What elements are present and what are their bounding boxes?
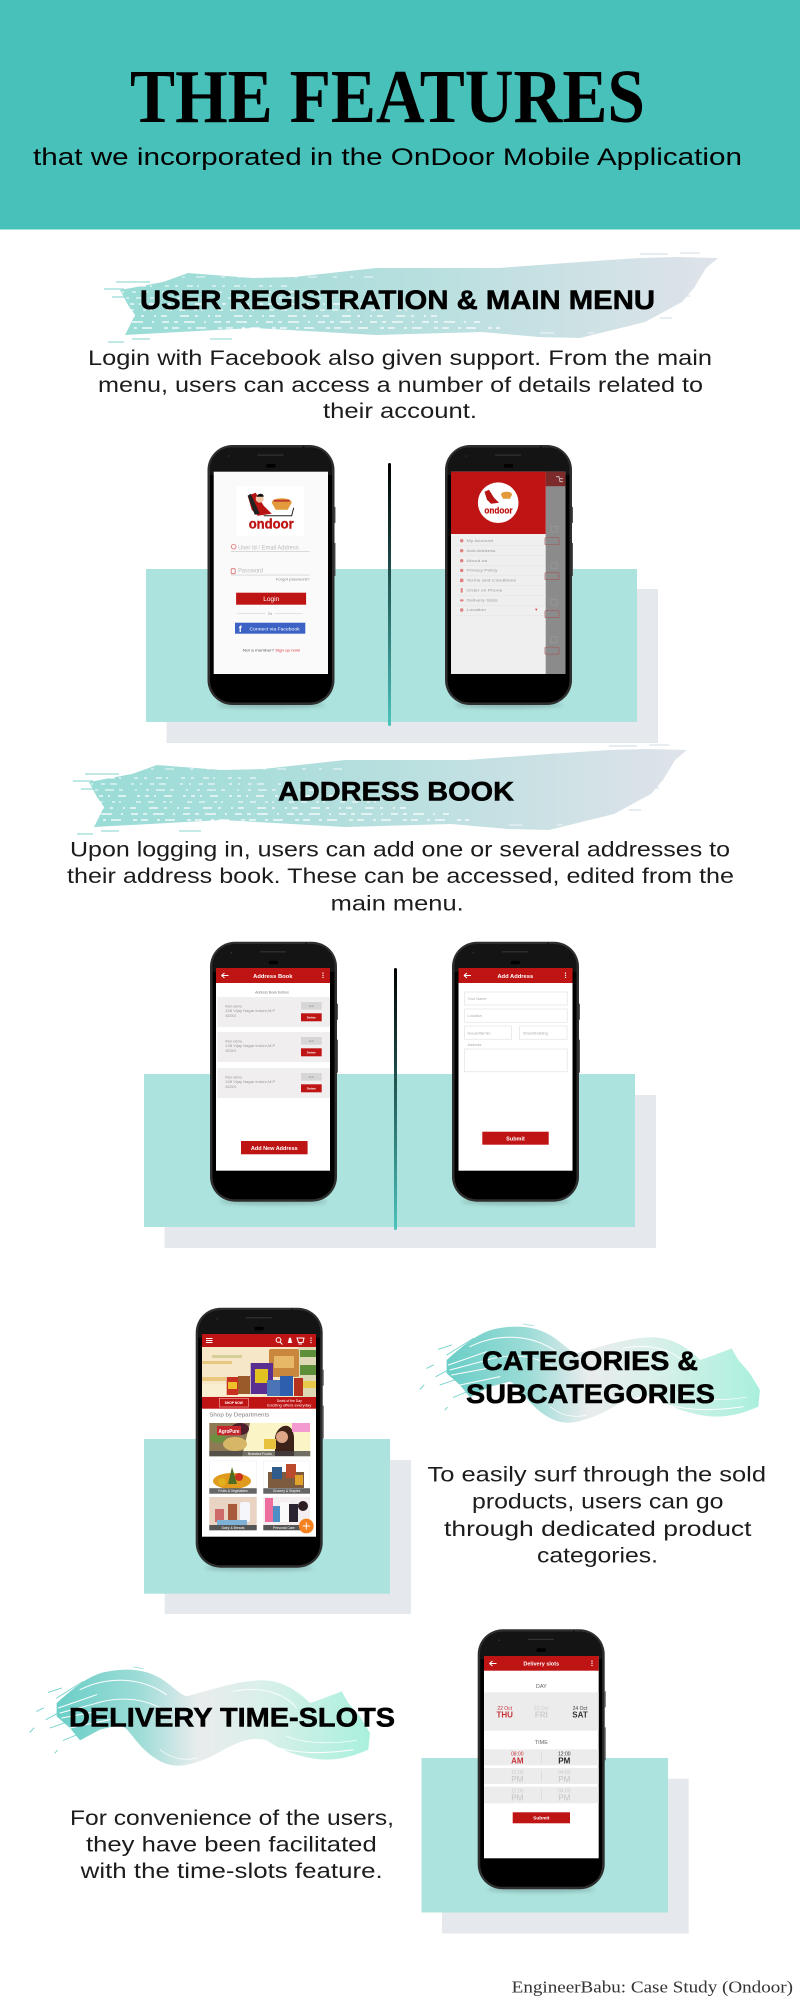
phone: login screen: Login (263, 596, 280, 603)
footer credit: EngineerBabu: Case Study (Ondoor) (512, 1978, 793, 1997)
phone: add address form: Submit (506, 1136, 525, 1142)
phone: address book list: Ravi varma (225, 1076, 242, 1080)
phone: main menu: Terms and Conditions (466, 578, 516, 583)
description: user registration: menu, users can access a number of details related to (98, 374, 703, 397)
phone: delivery slots: 12:00 (558, 1751, 571, 1757)
tile: personal care (263, 1497, 310, 1530)
description: address book: Upon logging in, users can add one or several addresses to (70, 839, 730, 862)
phone: login screen: Sign up now! (275, 649, 300, 653)
backdrop rectangles (144, 1439, 411, 1614)
phone: login screen: Or (268, 612, 273, 616)
brush stroke behind heading (73, 745, 687, 834)
phone: address book list: Delete (307, 1051, 316, 1055)
description: user registration: Login with Facebook also given support. From the main (88, 347, 712, 370)
description: categories (428, 1464, 766, 1568)
phone: delivery slots: DAY (536, 1684, 547, 1690)
description: categories: To easily surf through the sold (428, 1464, 766, 1487)
phone: delivery slots: FRI (535, 1710, 548, 1719)
title: THE FEATURES (130, 55, 645, 139)
tile: fruits: Fruits & Vegetables (218, 1489, 248, 1493)
phone: add address form: Add Address (497, 974, 533, 980)
divider (388, 463, 391, 726)
description: categories: through dedicated product (444, 1518, 752, 1541)
phone: home screen with categories (196, 1308, 324, 1571)
branded foods tile (209, 1423, 310, 1456)
backdrop rectangles (146, 569, 658, 743)
phone: main menu: Order on Phone (466, 588, 503, 593)
branded foods tile: Branded Foods (248, 1452, 272, 1456)
phone: delivery slots: PM (558, 1756, 571, 1765)
phone: address book list: Edit (309, 1075, 314, 1079)
phone: main menu: Add Address (466, 548, 496, 553)
phone: login screen: Password (238, 569, 263, 575)
heading: categories: SUBCATEGORIES (466, 1379, 715, 1409)
description: user registration: their account. (323, 400, 477, 423)
brush stroke behind heading (30, 1667, 370, 1766)
phone: address book list: Address Book Entries (255, 991, 289, 995)
phone: login screen: Not a member? (243, 649, 274, 653)
backdrop rectangles (144, 1074, 656, 1248)
description: user registration (88, 347, 712, 423)
phone: address book list: 452001 (225, 1085, 236, 1089)
phone: delivery slots: 22 Oct (497, 1706, 513, 1712)
phone: delivery slots: 08:00 (511, 1751, 524, 1757)
heading: address book: ADDRESS BOOK (278, 777, 515, 807)
phone: address book list: Delete (307, 1016, 316, 1020)
tile: grocery: Grocery & Staples (273, 1489, 301, 1493)
brush stroke behind heading (104, 253, 718, 342)
phone: delivery slots: 04:00 (558, 1789, 571, 1795)
phone: delivery slots: SAT (572, 1710, 588, 1719)
tile: dairy (209, 1497, 257, 1530)
phone: main menu: About us (466, 558, 487, 563)
phone: address book list: 108 Vijay Nagar indore,M.P (225, 1044, 276, 1048)
phone: delivery slots: THU (496, 1710, 513, 1719)
phone: login screen: ondoor (249, 515, 294, 531)
phone: delivery slots: 23 Oct (534, 1706, 549, 1712)
phone: delivery slots: Submit (533, 1816, 550, 1822)
phone: login screen (208, 445, 336, 708)
description: categories: categories. (537, 1545, 658, 1568)
phone: address book list: 452001 (225, 1014, 236, 1018)
phone: add address form: House/flat No (468, 1032, 491, 1036)
tile: dairy: Dairy & Breads (222, 1526, 245, 1530)
backdrop rectangles (422, 1758, 689, 1934)
description: address book: main menu. (331, 893, 464, 916)
phone: login screen: User Id / Email Address (238, 545, 299, 551)
phone: main menu: Delivery Slots (466, 598, 498, 603)
phone: delivery slots: 24 Oct (573, 1706, 588, 1712)
tile: personal care: Personal Care (273, 1526, 295, 1530)
description: delivery: with the time-slots feature. (79, 1860, 383, 1883)
phone: main menu: Location (466, 607, 486, 612)
phone: main menu: My Account (466, 538, 494, 543)
phone: main menu (445, 445, 573, 708)
phone: delivery slots: PM (511, 1775, 524, 1784)
phone: delivery slots: PM (558, 1775, 571, 1784)
phone: add address form: Your Name (468, 997, 486, 1001)
description: delivery (70, 1807, 394, 1883)
description: delivery: For convenience of the users, (70, 1807, 394, 1830)
subtitle: that we incorporated in the OnDoor Mobile Application (33, 144, 742, 171)
phone: delivery slots (478, 1629, 606, 1892)
description: categories: products, users can go (472, 1490, 724, 1514)
phone: home screen with categories: Exciting offers everyday (267, 1403, 312, 1407)
heading: categories: CATEGORIES & (482, 1346, 698, 1376)
phone: address book list: 108 Vijay Nagar indore,M.P (225, 1080, 276, 1084)
heading: delivery time-slots: DELIVERY TIME-SLOTS (69, 1703, 395, 1733)
phone: home screen with categories: Deals of the Day (277, 1399, 302, 1403)
brush stroke behind heading (420, 1324, 760, 1423)
phone: delivery slots: TIME (535, 1740, 548, 1746)
tile: fruits (209, 1461, 257, 1494)
phone: delivery slots: PM (511, 1794, 524, 1803)
phone: home screen with categories: Shop by Departments (209, 1412, 270, 1418)
phone: delivery slots: PM (558, 1794, 571, 1803)
phone: login screen: Forgot password? (276, 578, 310, 582)
description: address book: their address book. These can be accessed, edited from the (67, 865, 734, 888)
panel: delivery time-slots (30, 1629, 689, 1934)
description: address book (67, 839, 734, 916)
branded foods tile: AgroPure (218, 1429, 240, 1435)
phone: address book list: Delete (307, 1087, 316, 1091)
phone: address book list: 452001 (225, 1049, 236, 1053)
phone: home screen with categories: SHOP NOW (225, 1401, 244, 1405)
phone: add address form: Location (468, 1014, 482, 1018)
tile: grocery (263, 1461, 310, 1494)
phone: delivery slots: 12:00 (511, 1789, 524, 1795)
phone: address book list: Ravi varma (225, 1040, 242, 1044)
description: delivery: they have been facilitated (86, 1834, 377, 1857)
phone: address book list: Ravi varma (225, 1005, 242, 1009)
phone: main menu: ondoor (484, 505, 513, 515)
divider (394, 968, 397, 1230)
phone: add address form (452, 942, 580, 1205)
phone: address book list: Edit (309, 1039, 314, 1043)
phone: address book list: Edit (309, 1004, 314, 1008)
phone: address book list: Address Book (253, 974, 293, 980)
banner (202, 1347, 316, 1397)
icon: add button (299, 1519, 314, 1533)
header band (0, 0, 800, 230)
panel: categories and subcategories (144, 1308, 766, 1614)
phone: delivery slots: 12:00 (511, 1770, 524, 1776)
phone: delivery slots: AM (511, 1756, 524, 1765)
phone: delivery slots: 04:00 (558, 1770, 571, 1776)
phone: delivery slots: Delivery slots (523, 1661, 559, 1667)
heading: user registration: USER REGISTRATION & MAIN MENU (140, 285, 655, 315)
phone: address book list: 108 Vijay Nagar indore,M.P (225, 1009, 276, 1013)
heading: categories (466, 1346, 715, 1409)
phone: main menu: Privacy Policy (466, 568, 498, 573)
phone: login screen: Connect via Facebook (249, 626, 300, 631)
phone: add address form: Address (468, 1043, 482, 1047)
phone: add address form: Street/Building (523, 1032, 548, 1036)
phone: address book list: Add New Address (251, 1146, 298, 1152)
panel: address book (67, 745, 734, 1248)
phone: login screen: f (239, 624, 243, 634)
phone: address book list (210, 942, 338, 1205)
panel: user registration and main menu (88, 253, 718, 743)
